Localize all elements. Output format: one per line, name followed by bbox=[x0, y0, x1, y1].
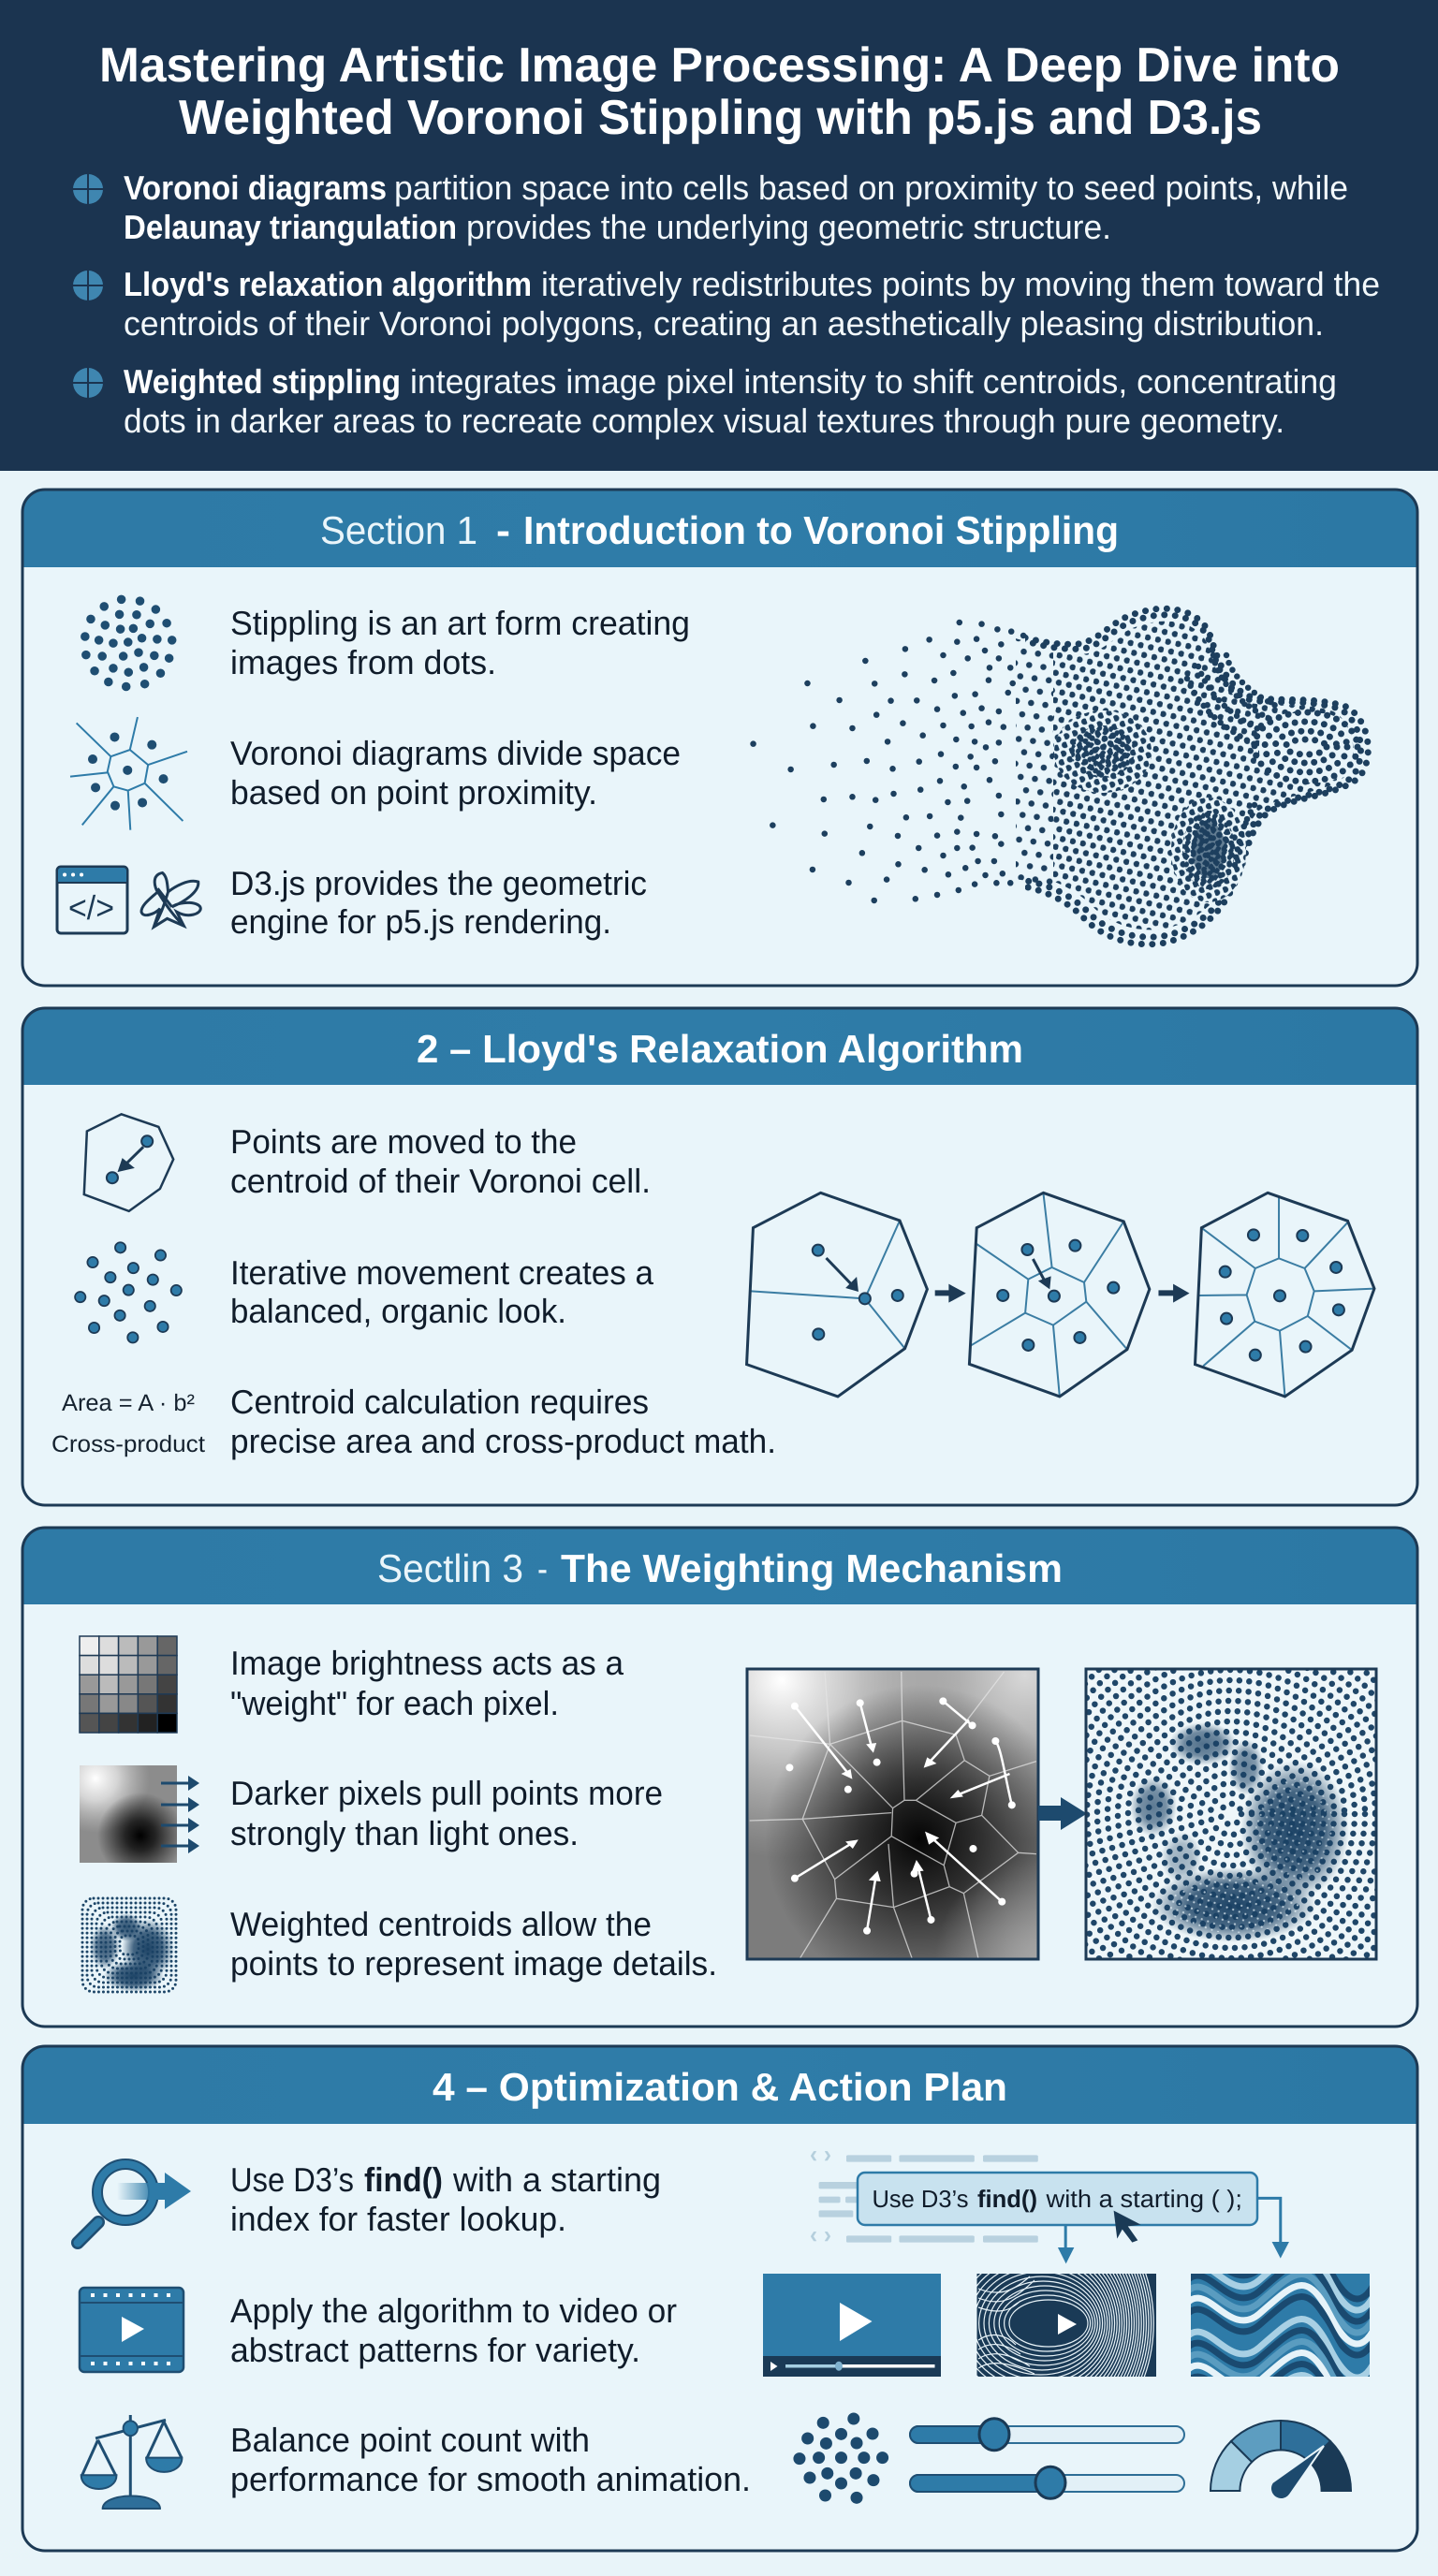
stage 2 bbox=[969, 1193, 1150, 1397]
bullet 3: dots in darker areas to recreate complex visual textures through pure geometry. bbox=[124, 402, 1284, 440]
bullet 2: Lloyd's relaxation algorithm bbox=[124, 265, 532, 303]
heading: section 3: - bbox=[537, 1546, 548, 1590]
text: video patterns: abstract patterns for variety. bbox=[230, 2331, 640, 2369]
text: d3 engine: D3.js provides the geometric bbox=[230, 864, 647, 902]
icon: formula labels: Area = A · b² bbox=[62, 1390, 195, 1416]
text: iterative movement: balanced, organic look. bbox=[230, 1292, 566, 1330]
callout: code box: find() bbox=[977, 2185, 1037, 2213]
bullet 1: partition space into cells based on proximity to seed points, while bbox=[394, 168, 1348, 207]
heading: section 1: - bbox=[496, 508, 510, 552]
heading: section 3: Sectlin 3 bbox=[377, 1546, 523, 1590]
text: weighted centroids bbox=[230, 1905, 717, 1983]
text: find lookup: Use D3’s bbox=[230, 2160, 354, 2199]
text: balance points bbox=[230, 2421, 751, 2498]
header panel bbox=[0, 0, 1438, 471]
text: d3 engine: engine for p5.js rendering. bbox=[230, 902, 611, 941]
control: slider 1 bbox=[910, 2419, 1184, 2451]
stage 1 bbox=[747, 1193, 927, 1397]
icon: point cluster bbox=[800, 2419, 883, 2497]
text: video patterns bbox=[230, 2291, 677, 2369]
title: Weighted Voronoi Stippling with p5.js and D3.js bbox=[179, 91, 1262, 145]
bullet 1: Voronoi diagrams bbox=[124, 168, 387, 207]
text: balance points: performance for smooth animation. bbox=[230, 2460, 751, 2498]
text: find lookup: index for faster lookup. bbox=[230, 2200, 566, 2238]
heading: section 4: 4 – Optimization & Action Plan bbox=[433, 2065, 1007, 2109]
panel: section 2 lloyd's relaxation bbox=[22, 1008, 1417, 1505]
bullet 3 bbox=[73, 362, 1337, 440]
heading: section 2: 2 – Lloyd's Relaxation Algorithm bbox=[417, 1027, 1023, 1071]
icon: cursor bbox=[1114, 2211, 1141, 2243]
bullet 1: provides the underlying geometric structure. bbox=[466, 208, 1111, 246]
bullet 2 bbox=[73, 265, 1380, 343]
control: slider 2 bbox=[910, 2466, 1184, 2498]
icon: balance scale bbox=[81, 2415, 182, 2509]
stage 3 bbox=[1195, 1193, 1374, 1397]
icon: performance gauge bbox=[1211, 2421, 1351, 2499]
image: weighted voronoi gradient bbox=[747, 1669, 1038, 1959]
graphic: faded code lines: ‹ › bbox=[810, 2140, 831, 2168]
icon: relaxed dots bbox=[81, 1248, 176, 1338]
text: weighted centroids: points to represent image details. bbox=[230, 1944, 717, 1983]
bullet 1: Delaunay triangulation bbox=[124, 208, 457, 246]
text: find lookup: with a starting bbox=[452, 2160, 661, 2199]
text: find lookup bbox=[230, 2160, 661, 2238]
text: brightness weight: Image brightness acts as a bbox=[230, 1644, 624, 1682]
icon: formula labels: Cross-product bbox=[51, 1431, 205, 1457]
heading: section 3: The Weighting Mechanism bbox=[561, 1546, 1063, 1590]
callout: code box: Use D3’s bbox=[873, 2185, 968, 2213]
text: balance points: Balance point count with bbox=[230, 2421, 590, 2459]
text: weighted centroids: Weighted centroids allow the bbox=[230, 1905, 652, 1943]
text: voronoi diagrams: Voronoi diagrams divide space bbox=[230, 734, 681, 772]
icon: film strip bbox=[80, 2288, 183, 2372]
graphic: faded code lines bbox=[810, 2140, 1038, 2248]
text: find lookup: find() bbox=[364, 2160, 443, 2199]
text: darker pixels bbox=[230, 1774, 663, 1852]
icon: voronoi cell bbox=[70, 717, 187, 830]
bullet 1 bbox=[73, 168, 1348, 246]
icon: stipple dots bbox=[85, 599, 172, 687]
thumbnail: video player bbox=[763, 2274, 941, 2377]
bullet 2: iteratively redistributes points by moving them toward the bbox=[541, 265, 1380, 303]
text: centroid move: Points are moved to the bbox=[230, 1122, 577, 1161]
icon: formula labels bbox=[51, 1390, 205, 1457]
text: centroid calculation: precise area and cross-product math. bbox=[230, 1422, 776, 1460]
bullet 3: Weighted stippling bbox=[124, 362, 401, 401]
text: voronoi diagrams bbox=[230, 734, 681, 812]
graphic: faded code lines: ‹ › bbox=[810, 2220, 831, 2248]
text: darker pixels: strongly than light ones. bbox=[230, 1814, 579, 1852]
arrow: image to stipple bbox=[1038, 1797, 1087, 1830]
text: centroid move: centroid of their Voronoi cell. bbox=[230, 1162, 651, 1200]
text: stippling: images from dots. bbox=[230, 643, 496, 681]
heading: section 1: Section 1 bbox=[320, 508, 477, 552]
text: centroid move bbox=[230, 1122, 651, 1200]
text: iterative movement: Iterative movement creates a bbox=[230, 1253, 654, 1292]
bullet 3: integrates image pixel intensity to shift centroids, concentrating bbox=[410, 362, 1337, 401]
icon: code window: </> bbox=[68, 888, 114, 927]
text: centroid calculation: Centroid calculation requires bbox=[230, 1383, 649, 1421]
icon: gradient pull bbox=[80, 1765, 199, 1863]
icon: cell with moving point bbox=[84, 1114, 173, 1211]
text: centroid calculation bbox=[230, 1383, 776, 1460]
icon: brightness grid bbox=[80, 1636, 177, 1733]
diagram: relaxation stages bbox=[747, 1193, 1374, 1397]
thumbnail: abstract waves bbox=[1191, 2274, 1370, 2377]
text: voronoi diagrams: based on point proximity. bbox=[230, 773, 597, 812]
image: stippled result bbox=[1084, 1668, 1378, 1960]
text: darker pixels: Darker pixels pull points more bbox=[230, 1774, 663, 1812]
text: stippling bbox=[230, 604, 690, 681]
panel: section 1 introduction bbox=[22, 490, 1417, 986]
chart: stippled blob bbox=[754, 608, 1368, 944]
arrow: stage 1 to 2 bbox=[935, 1284, 966, 1303]
arrow: stage 2 to 3 bbox=[1158, 1284, 1190, 1303]
bullet 2: centroids of their Voronoi polygons, creating an aesthetically pleasing distribution. bbox=[124, 304, 1324, 343]
icon: small stipple bbox=[82, 1898, 176, 1992]
text: video patterns: Apply the algorithm to video or bbox=[230, 2291, 677, 2330]
icon: magnifier arrow bbox=[78, 2164, 191, 2243]
icon: code window bbox=[57, 867, 127, 933]
text: d3 engine bbox=[230, 864, 647, 941]
title bbox=[99, 38, 1340, 145]
icon: d3 knot bbox=[141, 872, 200, 927]
thumbnail: contour stipple video bbox=[977, 2274, 1156, 2377]
panel: section 4 optimization bbox=[22, 2046, 1417, 2551]
arrows: callout connectors bbox=[1058, 2198, 1289, 2263]
panel: section 3 weighting mechanism bbox=[22, 1528, 1437, 2027]
callout: code box: with a starting ( ); bbox=[1045, 2185, 1242, 2213]
text: brightness weight bbox=[230, 1644, 624, 1722]
text: brightness weight: "weight" for each pixel. bbox=[230, 1684, 559, 1722]
text: iterative movement bbox=[230, 1253, 654, 1330]
heading: section 1: Introduction to Voronoi Stippling bbox=[523, 508, 1119, 552]
callout: code box bbox=[858, 2173, 1257, 2225]
text: stippling: Stippling is an art form creating bbox=[230, 604, 690, 642]
title: Mastering Artistic Image Processing: A Deep Dive into bbox=[99, 38, 1340, 93]
